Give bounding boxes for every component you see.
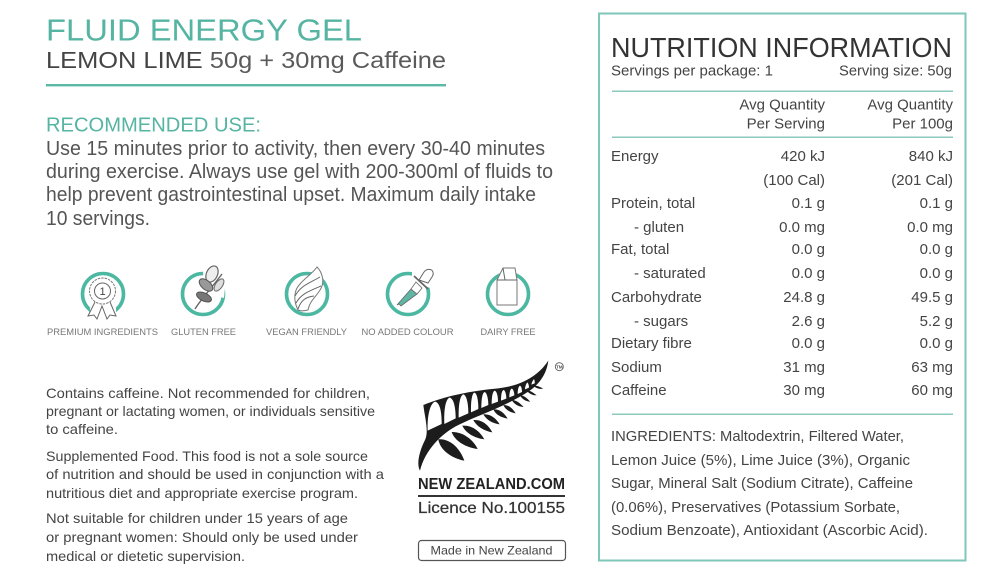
icon: gluten free <box>171 264 236 338</box>
ingredients <box>611 429 928 539</box>
nutrition table: (201 Cal) <box>891 172 953 189</box>
recommended use text <box>46 138 553 230</box>
section: recommended use <box>46 114 553 230</box>
recommended use text: Use 15 minutes prior to activity, then every 30-40 minutes <box>46 138 545 160</box>
servings line <box>611 64 952 80</box>
label: DAIRY FREE <box>480 327 536 338</box>
nutrition table: 0.0 g <box>920 241 953 258</box>
column headers: Avg Quantity <box>867 96 953 114</box>
badge: made in New Zealand: Made in New Zealand <box>430 544 552 558</box>
nutrition table: 0.0 g <box>792 335 825 352</box>
panel heading: NUTRITION INFORMATION <box>611 32 952 63</box>
nutrition table: 24.8 g <box>783 289 825 306</box>
nutrition table: 0.0 g <box>792 241 825 258</box>
nutrition table: 0.0 g <box>920 265 953 282</box>
nutrition table: 420 kJ <box>781 148 825 165</box>
label: GLUTEN FREE <box>171 327 236 338</box>
icon: silver fern: TM <box>556 364 563 369</box>
ingredients: INGREDIENTS: Maltodextrin, Filtered Water, <box>611 429 904 445</box>
icon: silver fern <box>418 361 563 471</box>
nutrition table: 0.1 g <box>920 195 953 212</box>
nutrition table: Protein, total <box>611 195 695 212</box>
warnings text: of nutrition and should be used in conjunction with a <box>46 466 384 482</box>
heading underline <box>46 84 446 86</box>
label: PREMIUM INGREDIENTS <box>47 327 158 338</box>
warnings text: Not suitable for children under 15 years of age <box>46 510 348 526</box>
nutrition table <box>611 148 953 399</box>
nutrition table: 60 mg <box>911 382 953 399</box>
icon: premium ingredients: 1 <box>99 286 106 298</box>
label: NO ADDED COLOUR <box>362 327 454 338</box>
label: VEGAN FRIENDLY <box>266 327 348 338</box>
NEW ZEALAND.COM: NEW ZEALAND.COM <box>418 476 565 493</box>
nutrition table: 5.2 g <box>920 313 953 330</box>
nutrition table: Energy <box>611 148 659 165</box>
nutrition table: 30 mg <box>783 382 825 399</box>
column headers: Per Serving <box>747 116 825 132</box>
nutrition table: 2.6 g <box>792 313 825 330</box>
icon: premium ingredients <box>47 274 158 338</box>
warnings text: or pregnant women: Should only be used under <box>46 529 358 545</box>
nutrition table: 63 mg <box>911 359 953 376</box>
ingredients: (0.06%), Preservatives (Potassium Sorbate, <box>611 500 900 516</box>
nutrition table: - gluten <box>634 219 684 236</box>
badge: made in New Zealand <box>418 540 566 560</box>
warnings text: Contains caffeine. Not recommended for children, <box>46 385 370 401</box>
icon row <box>47 264 536 338</box>
logo: New Zealand fern <box>418 361 565 517</box>
nutrition table: Carbohydrate <box>611 289 702 306</box>
nutrition table: Sodium <box>611 359 662 376</box>
nutrition table: 49.5 g <box>911 289 953 306</box>
nutrition table: - saturated <box>634 265 706 282</box>
warnings text <box>46 385 384 564</box>
nutrition table: 31 mg <box>783 359 825 376</box>
servings line: Serving size: 50g <box>839 64 952 80</box>
recommended use text: 10 servings. <box>46 208 150 230</box>
panel: nutrition information <box>599 14 966 560</box>
nutrition table: 0.0 mg <box>907 219 953 236</box>
icon: vegan friendly <box>266 267 348 338</box>
title: FLUID ENERGY GEL <box>46 12 362 48</box>
nutrition table: 0.0 g <box>920 335 953 352</box>
ingredients: Sodium Benzoate), Antioxidant (Ascorbic Acid). <box>611 523 928 539</box>
nutrition table: 0.1 g <box>792 195 825 212</box>
nutrition table: (100 Cal) <box>763 172 825 189</box>
recommended use heading: RECOMMENDED USE: <box>46 114 261 136</box>
nutrition table: - sugars <box>634 313 688 330</box>
warnings text: pregnant or lactating women, or individuals sensitive <box>46 403 375 419</box>
nutrition table: 840 kJ <box>909 148 953 165</box>
nutrition table: Fat, total <box>611 241 669 258</box>
warnings text: medical or dietetic supervision. <box>46 548 245 564</box>
column headers <box>739 96 953 132</box>
warnings text: nutritious diet and appropriate exercise program. <box>46 485 358 501</box>
recommended use text: help prevent gastrointestinal upset. Maximum daily intake <box>46 184 536 206</box>
icon: dairy free <box>480 268 536 338</box>
recommended use text: during exercise. Always use gel with 200-300ml of fluids to <box>46 161 553 183</box>
warnings text: to caffeine. <box>46 421 118 437</box>
warnings text: Supplemented Food. This food is not a sole source <box>46 448 368 464</box>
column headers: Avg Quantity <box>739 96 825 114</box>
ingredients: Sugar, Mineral Salt (Sodium Citrate), Caffeine <box>611 476 913 492</box>
servings line: Servings per package: 1 <box>611 64 773 80</box>
licence number: Licence No.100155 <box>418 500 565 517</box>
nutrition table: Caffeine <box>611 382 667 399</box>
icon: no added colour <box>362 269 454 338</box>
nutrition table: Dietary fibre <box>611 335 692 352</box>
nutrition table: 0.0 mg <box>779 219 825 236</box>
subtitle: LEMON LIME 50g + 30mg Caffeine <box>46 47 446 73</box>
ingredients: Lemon Juice (5%), Lime Juice (3%), Organic <box>611 453 910 469</box>
nutrition table: 0.0 g <box>792 265 825 282</box>
column headers: Per 100g <box>892 116 953 132</box>
trademark <box>555 363 563 371</box>
